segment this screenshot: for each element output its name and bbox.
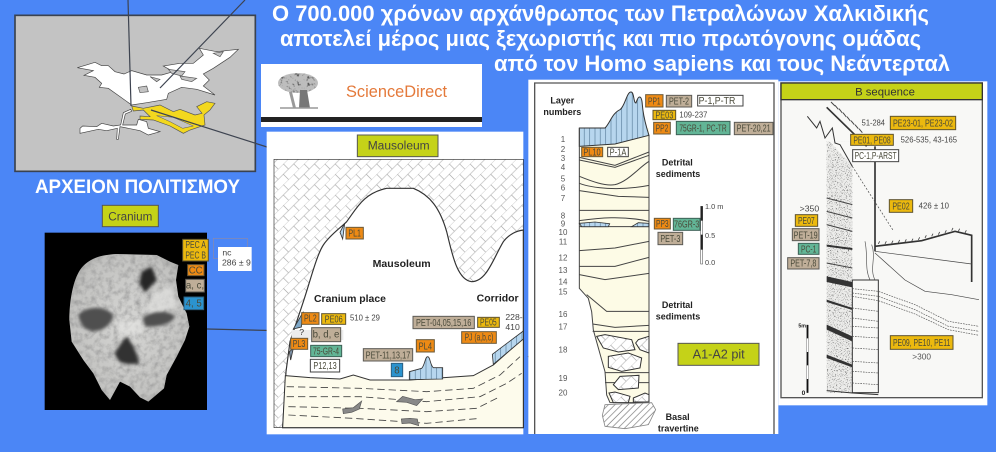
layer numbers: 13: [559, 266, 568, 275]
panel: cranium: [45, 205, 252, 410]
label: PC-1,P-ARST: PC-1,P-ARST: [855, 151, 897, 162]
label: PL4: PL4: [419, 341, 432, 352]
date: 109-237: 109-237: [679, 110, 707, 120]
label: PP3: PP3: [656, 219, 669, 230]
layer numbers: [543, 96, 581, 398]
label: 8: 8: [394, 366, 400, 377]
flowstones: [289, 223, 523, 380]
label: PE02: PE02: [892, 201, 910, 212]
label: PET-04,05,15,16: [413, 316, 474, 329]
sediment captions: travertine: [658, 424, 699, 434]
label: PEC A PEC B: [183, 239, 208, 261]
title: από τον Homo sapiens και τους Νεάντερταλ: [494, 51, 950, 76]
heading: B sequence: B sequence: [855, 86, 915, 98]
label: 75-GR-4: 75-GR-4: [313, 346, 339, 357]
chamber labels: Cranium place: [314, 294, 386, 305]
date: 228-410: 228-: [505, 312, 523, 322]
label: PET-3: [658, 232, 683, 245]
label: PE06: PE06: [325, 314, 343, 325]
label: CC: CC: [189, 265, 203, 276]
mausoleum chamber: [283, 188, 523, 428]
heading: A1-A2 pit: A1-A2 pit: [693, 347, 745, 361]
label: PE09 PE10 PE11: PE09, PE10, PE11: [893, 338, 950, 349]
title: αποτελεί μέρος μιας ξεχωριστής και πιο πρωτόγονης ομάδας: [280, 26, 921, 51]
date box: [213, 238, 252, 271]
label: PP2: [654, 122, 670, 135]
layer numbers: 8: [561, 212, 566, 221]
label: PC-1,P-ARST: [853, 150, 899, 162]
heading: Mausoleum: Mausoleum: [368, 139, 430, 153]
date: >350: >350: [800, 203, 819, 213]
label: P-1A: P-1A: [610, 147, 627, 158]
label: 76GR-3: 76GR-3: [674, 220, 699, 231]
scale bar: 1.0 m: [705, 202, 723, 211]
date: 510: 510 ± 29: [350, 312, 380, 322]
label: PL1: PL1: [348, 228, 361, 239]
label: PET-20,21: PET-20,21: [737, 124, 771, 135]
panel: ScienceDirect logo: [261, 64, 482, 127]
chamber labels: Mausoleum: [373, 259, 431, 270]
sediment captions: sediments: [656, 311, 700, 321]
layer numbers: 17: [559, 322, 568, 331]
layer numbers: 1: [561, 135, 566, 144]
scale bar: 0: [802, 390, 806, 397]
label: b, d, e: b, d, e: [313, 330, 339, 341]
layer numbers: 18: [559, 345, 568, 354]
layer numbers: 19: [559, 374, 568, 383]
layer numbers: 4: [561, 163, 566, 172]
label: 75GR-1, PC-TR: [676, 121, 730, 135]
connector lines: [128, 0, 907, 404]
label: PEC A PEC B: PEC A: [185, 240, 206, 251]
label: PET-11,13,17: [363, 349, 413, 361]
layer numbers: 11: [559, 237, 568, 246]
panel: B sequence: [778, 81, 987, 405]
label: PET-20,21: [734, 122, 773, 135]
layer numbers: 15: [559, 288, 568, 297]
cranium heading: Cranium: [108, 210, 152, 223]
label: a, c: a, c,: [186, 281, 204, 292]
label: PE07: [795, 215, 818, 227]
label: PL3: PL3: [293, 339, 305, 350]
sediment captions: [656, 158, 700, 434]
chamber labels: [314, 259, 519, 305]
label: PET-19: [792, 229, 819, 241]
panel: ScienceDirect logo: ScienceDirect: [346, 82, 447, 101]
label: PJ: PJ (a,b,c): [465, 333, 493, 344]
scale bar: [701, 202, 723, 267]
label: PET-7,8: PET-7,8: [790, 259, 816, 270]
label: PET-04,05,15,16: PET-04,05,15,16: [416, 318, 471, 329]
date: 228-410: 410: [505, 322, 520, 332]
label: PET-11,13,17: PET-11,13,17: [366, 350, 410, 361]
sediment floor: [283, 338, 523, 428]
title: Ο 700.000 χρόνων αρχάνθρωπος των Πετραλώνων Χαλκιδικής: [272, 1, 929, 26]
cranium photo: [45, 233, 207, 410]
label: PE02: [889, 200, 913, 212]
label: PE01, PE08: PE01, PE08: [853, 135, 891, 146]
layer column: [579, 92, 656, 429]
label: PE23: PE23-01, PE23-02: [893, 118, 953, 129]
date: 228-410: [505, 312, 523, 332]
label: PP2: PP2: [656, 124, 668, 135]
panel: cave map: [15, 15, 255, 171]
label: P12,13: P12,13: [313, 361, 337, 372]
label: 4, 5: 4, 5: [186, 299, 202, 310]
scale bar: 0.5: [705, 231, 715, 240]
label: 75GR-1, PC-TR: 75GR-1, PC-TR: [679, 124, 727, 135]
layer numbers: 9: [561, 220, 566, 229]
sediment captions: Detrital: [662, 158, 693, 168]
cranium heading: [102, 205, 158, 227]
label: P12,13: [310, 359, 340, 372]
label: PP1: [646, 95, 663, 107]
label: PL10: PL10: [583, 147, 601, 158]
layer numbers: 10: [559, 228, 568, 237]
layer numbers: numbers: [543, 107, 581, 117]
title: [272, 1, 950, 76]
heading: Mausoleum: [357, 135, 438, 157]
chamber labels: Corridor: [477, 294, 519, 305]
label: PE23: [890, 116, 956, 130]
scale bar: 5m: [798, 323, 806, 329]
panel: Mausoleum: [267, 132, 523, 434]
label: PP1: PP1: [648, 96, 661, 107]
cave passages: [77, 48, 238, 105]
label: PEC A PEC B: PEC B: [185, 250, 206, 261]
layer numbers: 6: [561, 183, 566, 192]
scale bar: [798, 323, 808, 397]
label: PET-19: PET-19: [794, 230, 818, 241]
layer numbers: 2: [561, 145, 566, 154]
sediment captions: sediments: [656, 169, 700, 179]
heading: B sequence: [781, 83, 982, 100]
panel: A1-A2 pit: [528, 80, 778, 434]
label: PE07: PE07: [798, 216, 815, 227]
label: PE09 PE10 PE11: [890, 336, 953, 349]
label: PE03: PE03: [655, 110, 673, 121]
label: 75-GR-4: [311, 345, 342, 357]
stratigraphy drawing: [807, 102, 979, 395]
lower cave passages: [80, 109, 160, 139]
label: PJ: [462, 332, 496, 344]
label: PP3: [654, 218, 670, 230]
layer numbers: 16: [559, 310, 568, 319]
label: PE01, PE08: [851, 134, 893, 146]
sediment captions: Detrital: [662, 300, 693, 310]
date: 426: 426 ± 10: [919, 201, 949, 211]
date: 526-535: 526-535, 43-165: [901, 134, 957, 144]
layer numbers: Layer: [550, 96, 575, 106]
label: 8: [391, 363, 403, 377]
layer numbers: 12: [559, 253, 568, 262]
sediment captions: Basal: [666, 412, 690, 422]
layer numbers: 14: [559, 277, 568, 286]
layer numbers: 3: [561, 154, 566, 163]
date: >300: >300: [912, 351, 931, 361]
archive caption: ΑΡΧΕΙΟΝ ΠΟΛΙΤΙΣΜΟΥ: [35, 177, 240, 198]
panel: Mausoleum: ?: [299, 327, 304, 337]
label: PC-1: PC-1: [801, 244, 816, 255]
label: P-1,P-TR: P-1,P-TR: [699, 96, 735, 107]
date box: 286 ± 9: [222, 258, 251, 268]
yellow cave section: [132, 102, 215, 133]
label: PC-1: [798, 243, 819, 255]
label: PET-2: [666, 95, 692, 108]
layer numbers: 20: [559, 389, 568, 398]
date: 51-284: 51-284: [862, 118, 885, 128]
label: 76GR-3: [673, 218, 700, 231]
date box: nc: [222, 248, 232, 258]
label: PL2: PL2: [304, 314, 317, 325]
layer numbers: 7: [561, 194, 566, 203]
icon: tree: [278, 73, 318, 108]
layer numbers: 5: [561, 174, 566, 183]
label: PET-3: PET-3: [660, 234, 680, 245]
heading: A1-A2 pit: [678, 343, 759, 365]
label: PET-2: PET-2: [669, 97, 689, 108]
label: PE05: PE05: [480, 318, 497, 329]
scale bar: 0.0: [705, 258, 715, 267]
